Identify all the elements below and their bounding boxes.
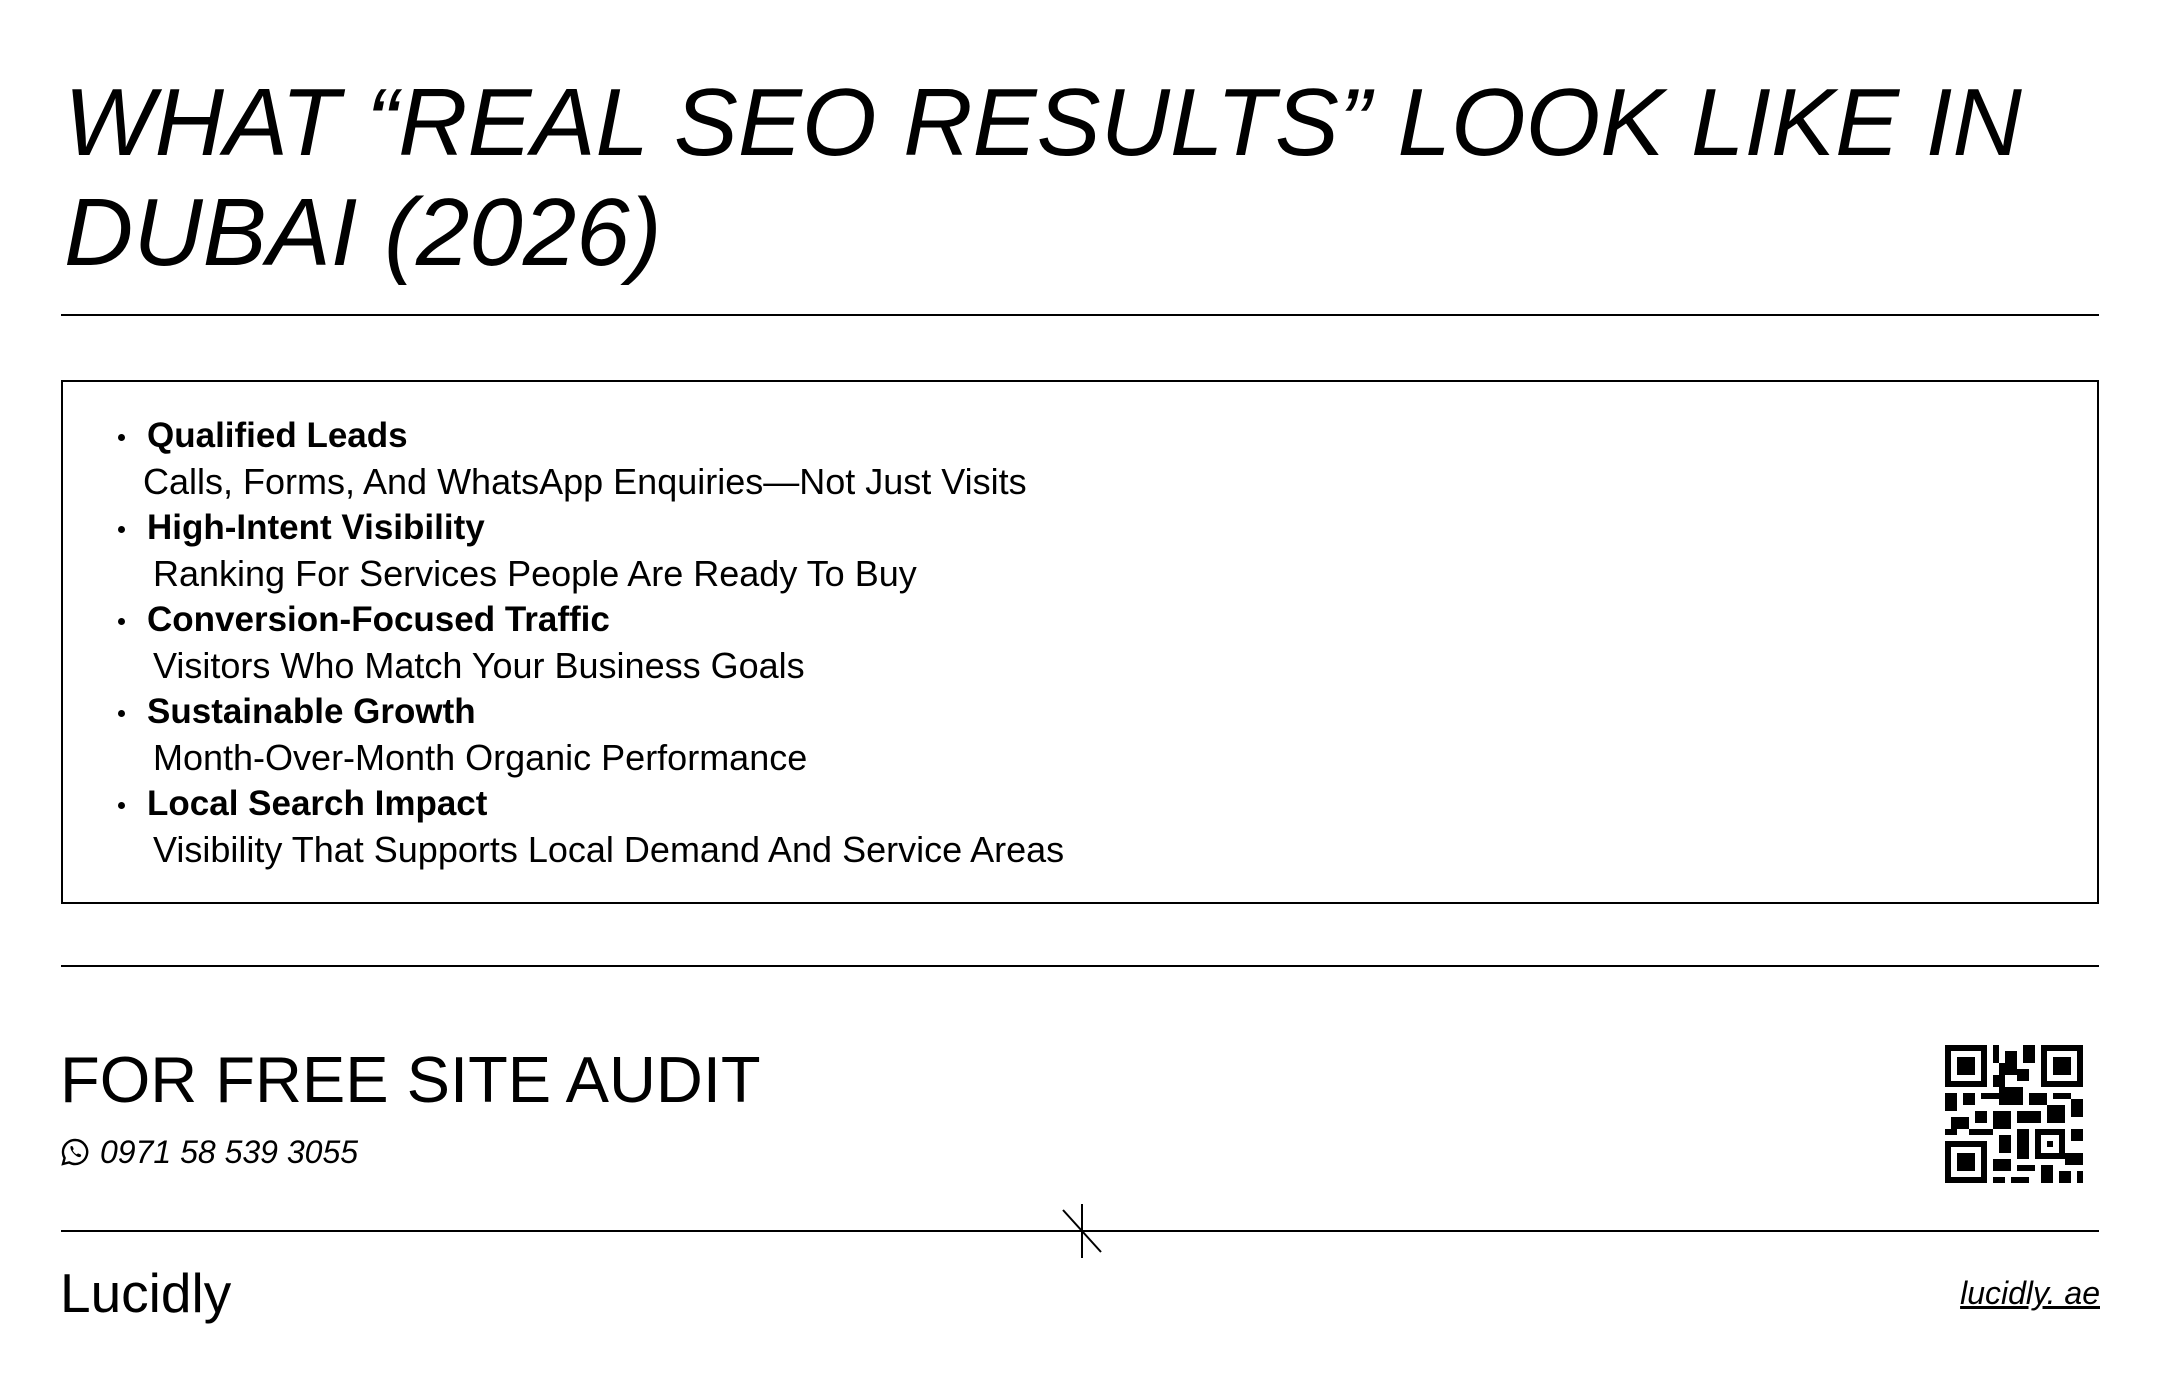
qr code [1945,1045,2083,1183]
item: qualified leads: Qualified Leads [147,416,408,455]
item: conversion-focused traffic: Conversion-Focused Traffic [147,600,610,639]
item: high-intent visibility: High-Intent Visibility [147,508,485,547]
item: sustainable growth: Sustainable Growth [147,692,476,731]
item: sustainable growth [118,692,807,778]
title: WHAT “REAL SEO RESULTS” LOOK LIKE IN [64,69,2022,176]
item: sustainable growth: Month-Over-Month Organic Performance [153,737,807,778]
item: conversion-focused traffic: Visitors Who Match Your Business Goals [153,645,805,686]
item: qualified leads [118,416,1027,502]
logo: lucidly: Lucidly [60,1262,231,1324]
phone contact: 0971 58 539 3055 [100,1134,358,1170]
item: local search impact: Visibility That Supports Local Demand And Service Areas [153,829,1064,870]
icon: star mark [1062,1204,1102,1258]
title [64,69,2022,286]
item: qualified leads: Calls, Forms, And WhatsApp Enquiries—Not Just Visits [143,461,1027,502]
title: DUBAI (2026) [64,179,662,286]
item: high-intent visibility [118,508,917,594]
item: conversion-focused traffic [118,600,805,686]
website link: lucidly. ae [1960,1275,2100,1311]
item: high-intent visibility: Ranking For Services People Are Ready To Buy [153,553,917,594]
icon: whatsapp [61,1138,88,1166]
item: local search impact: Local Search Impact [147,784,487,823]
item: local search impact [118,784,1064,870]
heading: free site audit: FOR FREE SITE AUDIT [60,1043,761,1116]
panel: results list [61,380,2099,904]
